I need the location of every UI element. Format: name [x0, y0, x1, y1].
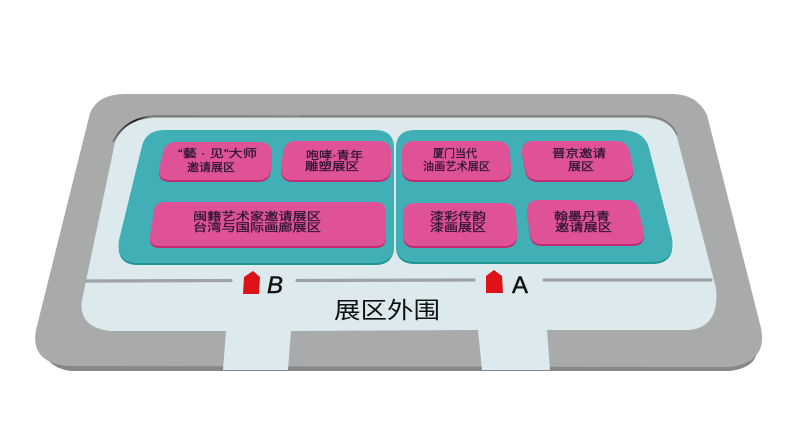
zone outer label: 展区外围: [334, 297, 440, 323]
right teal zone A: [396, 130, 672, 264]
booth: 蓺见大师邀请展区: “藝 · 见”大师: [178, 146, 257, 160]
wall line middle: [297, 278, 474, 282]
booth: 咆哮青年雕塑展区: 咆哮·青年: [306, 148, 363, 162]
entrance marker B: [243, 271, 283, 299]
entrance marker A: [486, 270, 528, 299]
booth: 蓺见大师邀请展区: [159, 142, 272, 182]
booth: 厦门当代油画艺术展区: [402, 141, 511, 182]
booth: 翰墨丹青邀请展区: 邀请展区: [555, 220, 612, 234]
booth: 咆哮青年雕塑展区: 雕塑展区: [305, 159, 359, 173]
wall line left: [86, 279, 231, 283]
floor plan: [35, 94, 762, 371]
booth: 漆彩传韵漆画展区: 漆画展区: [430, 221, 486, 234]
outer gray hall slab: [35, 94, 762, 371]
booth: 翰墨丹青邀请展区: 翰墨丹青: [554, 209, 610, 223]
booth: 闽籍艺术家邀请展区 台湾与国际画廊展区: [150, 202, 386, 248]
entrance marker B: B: [267, 272, 283, 299]
booth: 漆彩传韵漆画展区: 漆彩传韵: [430, 209, 486, 223]
entrance marker A: A: [512, 272, 528, 299]
booth: 闽籍艺术家邀请展区 台湾与国际画廊展区: 闽籍艺术家邀请展区: [193, 209, 321, 223]
booth: 蓺见大师邀请展区: 邀请展区: [187, 160, 235, 174]
booth: 翰墨丹青邀请展区: [527, 200, 644, 246]
booth: 咆哮青年雕塑展区: [281, 141, 391, 182]
wall line right: [544, 278, 711, 282]
booth: 晋京邀请展区: 晋京邀请: [552, 146, 606, 160]
booth: 厦门当代油画艺术展区: 厦门当代: [433, 146, 477, 160]
left teal zone B: [119, 130, 394, 265]
booth: 漆彩传韵漆画展区: [403, 203, 517, 248]
booth: 闽籍艺术家邀请展区 台湾与国际画廊展区: 台湾与国际画廊展区: [193, 220, 321, 234]
inner light floor with entrance roads: [82, 116, 716, 370]
booth: 晋京邀请展区: [522, 141, 633, 182]
booth: 晋京邀请展区: 展区: [568, 160, 594, 173]
booth: 厦门当代油画艺术展区: 油画艺术展区: [423, 159, 490, 173]
